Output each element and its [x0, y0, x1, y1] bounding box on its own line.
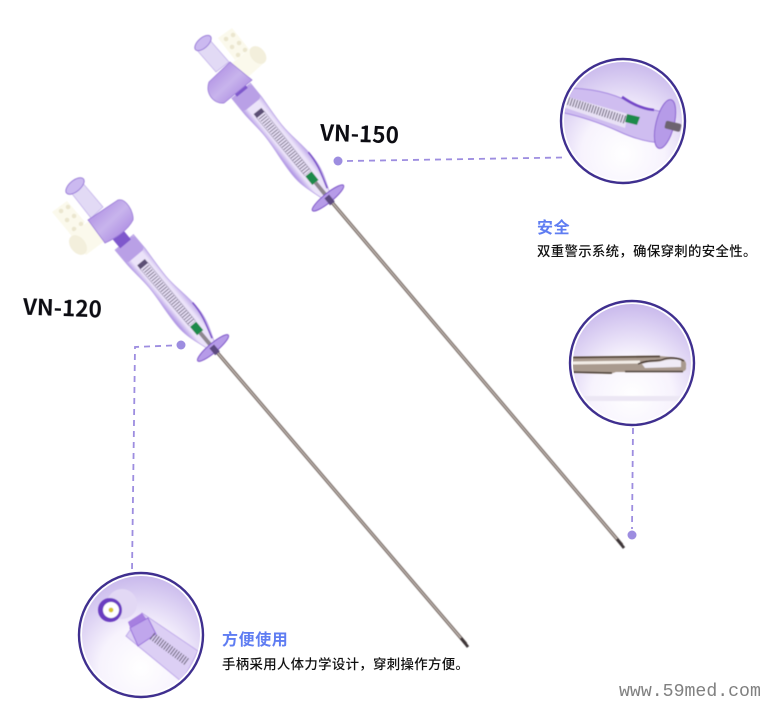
- callout line VN-120: [132, 340, 186, 571]
- detail circle: needle tip: [570, 301, 694, 425]
- white ridged grip: [52, 201, 106, 258]
- model label VN-120: VN-120: [22, 290, 102, 324]
- callout line VN-150: [334, 156, 563, 166]
- heading: safety: 安全: [537, 220, 570, 237]
- purple valve band: [88, 200, 133, 243]
- clear port: [192, 33, 229, 72]
- callout line tip: [628, 428, 636, 540]
- model label VN-150: VN-150: [319, 116, 399, 150]
- purple valve band: [208, 62, 252, 103]
- text: convenience: 手柄采用人体力学设计，穿刺操作方便。: [222, 657, 469, 672]
- heading: convenience: 方便使用: [222, 632, 288, 649]
- detail circle: handle tail: [560, 59, 685, 183]
- shaft: [330, 200, 622, 545]
- detail circle: hub view: [79, 573, 203, 697]
- white ridged grip: [218, 28, 270, 78]
- needle VN-120: [52, 175, 468, 647]
- handle: [219, 70, 348, 216]
- clear port: [63, 175, 103, 218]
- text: safety: 双重警示系统，确保穿刺的安全性。: [537, 244, 757, 259]
- needle VN-150: [192, 28, 624, 548]
- shaft: [216, 351, 466, 644]
- handle: [103, 222, 233, 366]
- watermark: www.59med.com: [619, 682, 761, 702]
